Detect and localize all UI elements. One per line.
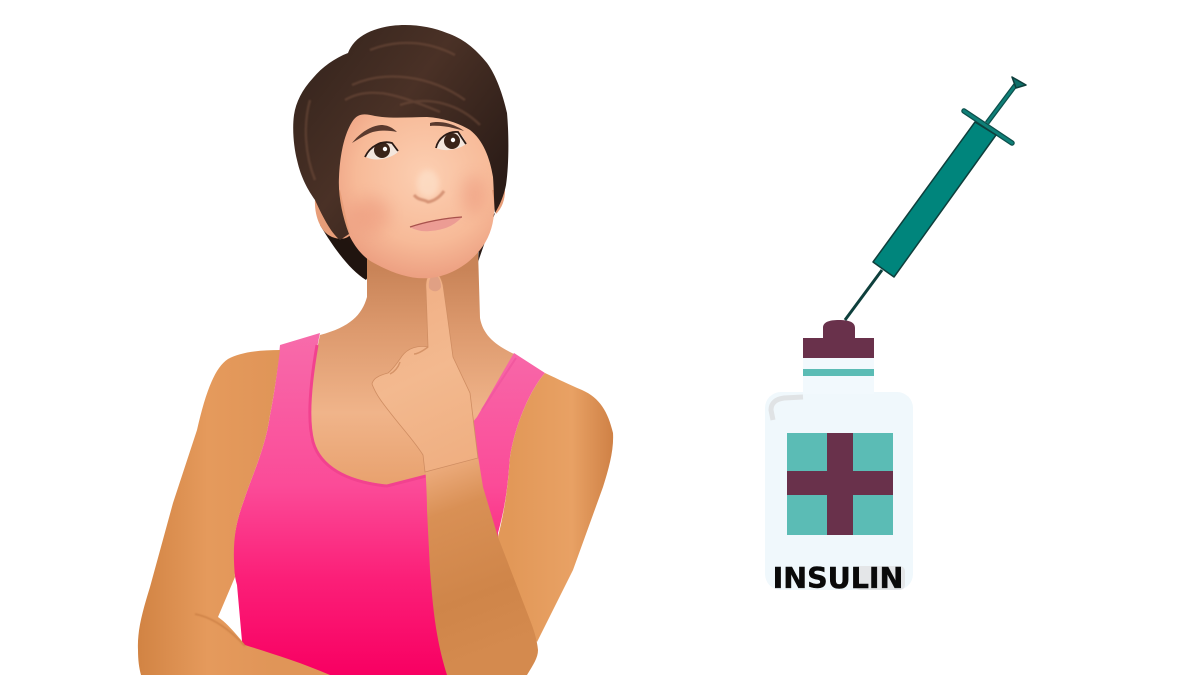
hair bbox=[293, 25, 508, 240]
shade behind label bbox=[855, 566, 905, 590]
face bbox=[337, 105, 496, 278]
ear bbox=[315, 190, 350, 239]
right eyebrow bbox=[430, 122, 464, 131]
left eyebrow bbox=[352, 125, 397, 143]
left arm bbox=[138, 350, 330, 675]
left eye bbox=[365, 142, 398, 159]
vial highlight bbox=[771, 397, 803, 420]
insulin vial bbox=[765, 320, 913, 595]
hair highlights bbox=[306, 43, 480, 180]
neckline trim bbox=[310, 345, 426, 486]
pink tank top bbox=[233, 333, 545, 675]
mouth bbox=[410, 217, 462, 231]
neck and chest bbox=[300, 250, 514, 490]
forearm bbox=[425, 450, 538, 675]
syringe bbox=[845, 77, 1026, 320]
woman thinking with finger on chin bbox=[138, 25, 613, 675]
teal neck stripe bbox=[803, 369, 874, 376]
vial neck bbox=[803, 358, 874, 394]
barrel bbox=[873, 122, 996, 277]
hand with raised finger bbox=[372, 272, 478, 472]
right upper arm bbox=[498, 373, 613, 642]
medical cross label bbox=[787, 433, 893, 535]
plunger tip bbox=[1012, 77, 1026, 88]
hair behind neck bbox=[320, 205, 385, 280]
right eye bbox=[436, 132, 466, 150]
cap bbox=[803, 320, 874, 358]
nose bbox=[417, 170, 439, 198]
plunger rod bbox=[987, 83, 1017, 123]
needle bbox=[845, 270, 882, 320]
vial body bbox=[765, 392, 913, 590]
flange bbox=[964, 111, 1012, 143]
insulin label text: INSULIN bbox=[773, 562, 903, 595]
